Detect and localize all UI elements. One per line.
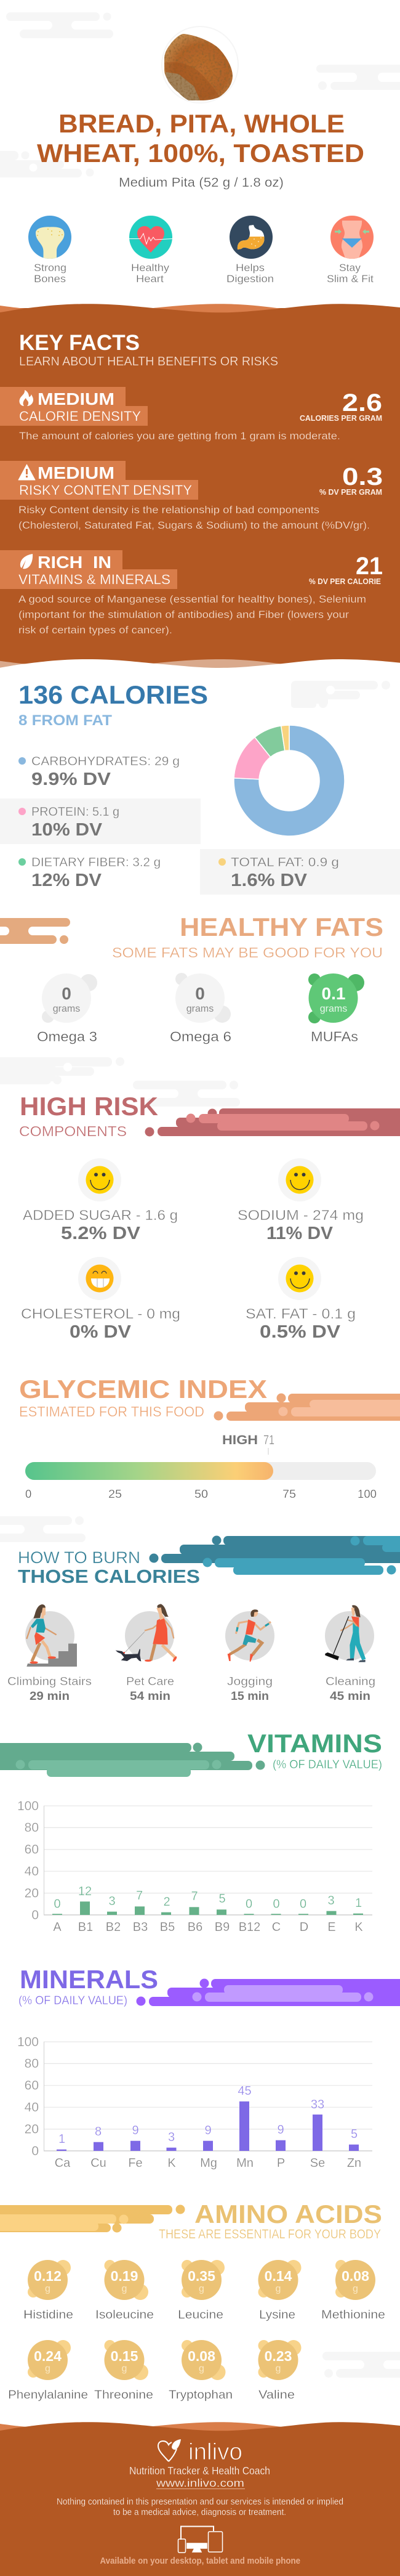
legend: carbohydrates: 9.9% DV <box>31 770 111 789</box>
heading: those calories: THOSE CALORIES <box>18 1566 200 1587</box>
benefit labels: Stay <box>339 262 361 274</box>
item: sodium: 11% DV <box>266 1224 334 1243</box>
icon: warning <box>18 465 35 480</box>
panel: calories <box>0 680 400 895</box>
legend: protein: PROTEIN: 5.1 g <box>31 805 119 819</box>
amino: tryptophan: 0.08 <box>188 2348 215 2364</box>
fact: rich in vitamins and minerals <box>0 550 383 636</box>
bar chart: minerals: 9 <box>277 2123 284 2137</box>
label: RISKY CONTENT DENSITY <box>19 482 192 498</box>
description: Risky Content density is the relationship of bad components <box>18 505 319 516</box>
gauge scale: 0 <box>25 1487 31 1500</box>
amino: valine: 0.23 <box>265 2348 292 2364</box>
item: cholesterol: CHOLESTEROL - 0 mg <box>21 1306 180 1322</box>
activity labels: 45 min <box>330 1690 370 1703</box>
value: 2.6 <box>342 389 382 416</box>
bar chart: minerals: 3 <box>168 2131 175 2144</box>
heading decoration <box>0 2204 185 2233</box>
activity: cleaning <box>325 1605 374 1662</box>
disclaimer: Nothing contained in this presentation and our services is intended or implied <box>57 2497 343 2507</box>
item: added sugar: ADDED SUGAR - 1.6 g <box>23 1207 178 1223</box>
heading decoration <box>214 1394 400 1421</box>
legend: dietary fiber <box>18 856 161 890</box>
activity labels <box>7 1675 375 1703</box>
panel: how to burn those calories <box>7 1535 400 1703</box>
item: cholesterol <box>21 1257 180 1342</box>
amino: valine <box>258 2340 302 2402</box>
item: added sugar <box>23 1158 178 1243</box>
activity: pet care <box>116 1604 178 1662</box>
legend: protein <box>0 798 201 844</box>
heading: calories: 136 CALORIES <box>18 680 208 709</box>
activity labels: 54 min <box>130 1690 170 1703</box>
icon: flame <box>19 390 33 406</box>
heading: high risk: HIGH RISK <box>20 1092 158 1121</box>
serving size: Medium Pita (52 g / 1.8 oz) <box>119 176 284 190</box>
bar chart: vitamins: B3 <box>133 1920 148 1934</box>
bar chart: vitamins: 0 <box>31 1908 39 1922</box>
bar chart: vitamins <box>17 1799 372 1934</box>
amino: histidine: Histidine <box>23 2309 73 2322</box>
disclaimer <box>57 2497 343 2517</box>
gauge bar <box>25 1462 376 1480</box>
amino: lysine: g <box>276 2283 281 2294</box>
bar chart: minerals: 9 <box>204 2124 212 2137</box>
icon: strong bones <box>28 216 71 260</box>
subheading: from fat: 8 FROM FAT <box>18 712 112 729</box>
heading decoration <box>145 1108 400 1136</box>
panel: amino acids <box>0 2200 385 2402</box>
panel: glycemic index <box>19 1375 400 1500</box>
rating: MEDIUM <box>38 389 114 408</box>
bar chart: minerals: 45 <box>238 2084 252 2098</box>
amino: leucine <box>178 2260 225 2322</box>
bar chart: vitamins: C <box>272 1920 281 1934</box>
donut chart <box>234 725 345 836</box>
label: VITAMINS & MINERALS <box>18 572 170 587</box>
disclaimer: to be a medical advice, diagnosis or treatment. <box>113 2508 286 2517</box>
benefit labels: Heart <box>136 273 164 285</box>
bar chart: minerals: 20 <box>25 2122 39 2137</box>
gauge scale: 50 <box>194 1487 208 1500</box>
bar chart: vitamins: K <box>354 1920 363 1934</box>
amino: isoleucine: 0.19 <box>111 2268 138 2284</box>
heading: minerals: MINERALS <box>20 1965 158 1994</box>
rating: MEDIUM <box>38 463 114 482</box>
amino: threonine: 0.15 <box>111 2348 138 2364</box>
bar chart: vitamins: 60 <box>25 1842 39 1857</box>
heading: healthy fats: HEALTHY FATS <box>180 912 383 941</box>
logo: inlivo <box>158 2439 242 2465</box>
header clouds <box>0 12 400 177</box>
omega 6 <box>170 973 231 1044</box>
heading: vitamins: VITAMINS <box>247 1729 382 1758</box>
bar chart: vitamins: 100 <box>17 1799 39 1813</box>
legend: total fat: TOTAL FAT: 0.9 g <box>231 856 339 869</box>
rating label: HIGH <box>222 1433 258 1447</box>
bar chart: vitamins: 5 <box>218 1892 226 1906</box>
bar chart: minerals: 1 <box>58 2132 65 2146</box>
activity labels: 15 min <box>231 1690 269 1703</box>
label: CALORIE DENSITY <box>19 408 141 424</box>
panel: high risk components <box>19 1092 400 1342</box>
bar chart: minerals: 60 <box>25 2079 39 2092</box>
subheading: components: COMPONENTS <box>19 1123 127 1139</box>
legend: dietary fiber: 12% DV <box>31 871 102 890</box>
bar chart: vitamins: B9 <box>215 1920 230 1934</box>
bar chart: vitamins: 7 <box>191 1890 198 1903</box>
benefit labels: Healthy <box>131 262 170 274</box>
amino: phenylalanine: g <box>45 2363 50 2374</box>
description: The amount of calories you are getting from 1 gram is moderate. <box>19 431 340 442</box>
logo: inlivo: inlivo <box>188 2439 242 2465</box>
mufas: grams <box>320 1004 347 1014</box>
rating label: 71 <box>263 1433 274 1447</box>
bar chart: minerals: Cu <box>90 2156 106 2170</box>
bar chart: vitamins: A <box>53 1920 62 1934</box>
icon: healthy heart <box>129 216 172 259</box>
tagline: Nutrition Tracker & Health Coach <box>129 2464 270 2477</box>
item: cholesterol: 0% DV <box>70 1322 132 1342</box>
icon: digestion <box>230 216 273 259</box>
amino: phenylalanine <box>8 2340 88 2402</box>
bar chart: vitamins: 20 <box>25 1887 39 1900</box>
legend: carbohydrates: CARBOHYDRATES: 29 g <box>31 755 180 768</box>
unit: % DV PER CALORIE <box>309 577 381 586</box>
omega 3: grams <box>53 1004 80 1014</box>
rating label <box>222 1433 274 1455</box>
amino: tryptophan: g <box>199 2363 204 2374</box>
unit: CALORIES PER GRAM <box>300 413 382 423</box>
fact: risky content density <box>0 461 383 531</box>
gauge scale: 75 <box>282 1487 296 1500</box>
amino: threonine: Threonine <box>94 2389 153 2402</box>
mufas: 0.1 <box>322 984 345 1003</box>
value: 21 <box>356 553 383 580</box>
benefit labels: Helps <box>236 262 265 274</box>
panel: vitamins <box>0 1729 382 1934</box>
gauge scale: 100 <box>358 1487 377 1500</box>
icon: slim and fit <box>330 216 374 260</box>
amino: threonine: g <box>122 2363 127 2374</box>
heading decoration <box>0 918 70 944</box>
title: WHEAT, 100%, TOASTED <box>37 139 364 168</box>
omega 3: 0 <box>62 984 71 1003</box>
bar chart: minerals: 33 <box>311 2098 324 2111</box>
bar chart: vitamins: B2 <box>106 1920 121 1934</box>
subheading: (% OF DAILY VALUE) <box>18 1994 127 2007</box>
amino: methionine: Methionine <box>321 2309 385 2322</box>
amino: threonine <box>94 2340 153 2402</box>
bar chart: vitamins: E <box>327 1920 336 1934</box>
website: www.inlivo.com <box>156 2477 244 2489</box>
item: added sugar: 5.2% DV <box>61 1224 141 1243</box>
heading: glycemic index: GLYCEMIC INDEX <box>19 1375 267 1404</box>
icon: leaf <box>20 554 33 569</box>
icon: devices <box>178 2526 223 2553</box>
bar chart: minerals: 8 <box>95 2125 102 2139</box>
mufas <box>308 973 364 1044</box>
legend: dietary fiber: DIETARY FIBER: 3.2 g <box>31 856 161 869</box>
amino: isoleucine <box>95 2260 154 2322</box>
description <box>18 594 366 636</box>
description: A good source of Manganese (essential for healthy bones), Selenium <box>18 594 366 605</box>
amino: histidine: g <box>45 2283 50 2294</box>
bar chart: vitamins: 12 <box>78 1885 92 1898</box>
amino: valine: g <box>276 2363 281 2374</box>
availability note: Available on your desktop, tablet and mobile phone <box>100 2556 300 2566</box>
activity labels: Climbing Stairs <box>7 1675 92 1688</box>
legend: total fat <box>200 849 400 895</box>
bar chart: minerals: 100 <box>17 2035 39 2049</box>
bar chart: minerals: Zn <box>347 2156 361 2170</box>
bar chart: vitamins: D <box>300 1920 308 1934</box>
bar chart: minerals: 0 <box>31 2144 39 2158</box>
bar chart: vitamins: 2 <box>163 1895 170 1909</box>
title: BREAD, PITA, WHOLE <box>58 109 345 138</box>
amino: leucine: Leucine <box>178 2309 223 2322</box>
item: saturated fat: 0.5% DV <box>260 1322 341 1342</box>
amino: isoleucine: Isoleucine <box>95 2309 154 2322</box>
amino: leucine: 0.35 <box>188 2268 215 2284</box>
amino: leucine: g <box>199 2283 204 2294</box>
omega 6: 0 <box>195 984 205 1003</box>
amino: valine: Valine <box>258 2389 295 2402</box>
legend: protein: 10% DV <box>31 820 103 840</box>
bar chart: vitamins: 0 <box>54 1898 61 1911</box>
description: risk of certain types of cancer). <box>18 625 172 636</box>
bar chart: vitamins: 3 <box>327 1894 335 1908</box>
omega 6: Omega 6 <box>170 1029 231 1044</box>
subheading: LEARN ABOUT HEALTH BENEFITS OR RISKS <box>19 354 278 368</box>
amino: lysine: Lysine <box>259 2309 295 2322</box>
gauge scale <box>25 1487 377 1500</box>
amino: histidine <box>23 2260 73 2322</box>
amino: histidine: 0.12 <box>34 2268 62 2284</box>
bar chart: vitamins: 0 <box>246 1898 252 1911</box>
item: sodium: SODIUM - 274 mg <box>238 1207 364 1223</box>
title <box>37 109 364 168</box>
bar chart: vitamins: 40 <box>25 1864 39 1879</box>
panel: healthy fats <box>0 912 383 1044</box>
panel: key facts <box>0 304 400 673</box>
activity labels: 29 min <box>30 1690 70 1703</box>
subheading: ESTIMATED FOR THIS FOOD <box>19 1404 204 1420</box>
bar chart: vitamins: B1 <box>78 1920 93 1934</box>
bar chart: vitamins: 1 <box>355 1896 362 1910</box>
description <box>18 505 370 531</box>
description: (Cholesterol, Saturated Fat, Sugars & Sodium) to the amount (%DV/gr). <box>18 520 370 531</box>
bar chart: vitamins: 0 <box>300 1898 306 1911</box>
bar chart: minerals: 40 <box>25 2100 39 2115</box>
amino: methionine: g <box>353 2283 358 2294</box>
bar chart: minerals: Mn <box>236 2156 254 2170</box>
amino: methionine <box>321 2260 385 2322</box>
item: saturated fat <box>246 1257 356 1342</box>
omega 3 <box>37 973 97 1044</box>
bar chart: minerals: K <box>167 2156 176 2170</box>
panel: footer <box>0 2422 400 2576</box>
benefit labels <box>34 262 374 285</box>
subheading: (% OF DAILY VALUE) <box>273 1758 382 1771</box>
bar chart: minerals: 5 <box>351 2127 358 2141</box>
bar chart: minerals: Se <box>310 2156 325 2170</box>
bar chart: minerals: Ca <box>55 2156 71 2170</box>
heading decoration <box>137 1979 400 2006</box>
bar chart: minerals <box>17 2035 372 2170</box>
benefit icons row <box>28 216 374 285</box>
amino: lysine <box>258 2260 302 2322</box>
bar chart: vitamins: 80 <box>25 1821 39 1835</box>
fact: calorie density <box>0 387 382 442</box>
bar chart: minerals: P <box>277 2156 285 2170</box>
benefit labels: Digestion <box>226 273 274 285</box>
item: saturated fat: SAT. FAT - 0.1 g <box>246 1306 356 1322</box>
heading decoration <box>149 1535 400 1575</box>
item: sodium <box>238 1158 364 1243</box>
value: 0.3 <box>342 463 383 490</box>
unit: % DV PER GRAM <box>319 487 382 497</box>
gauge scale: 25 <box>108 1487 122 1500</box>
activity labels: Jogging <box>227 1675 273 1688</box>
bar chart: vitamins: B5 <box>160 1920 175 1934</box>
amino: isoleucine: g <box>122 2283 127 2294</box>
description: (important for the stimulation of antibodies) and Fiber (lowers your <box>18 609 350 620</box>
omega 3: Omega 3 <box>37 1029 97 1044</box>
amino: phenylalanine: 0.24 <box>34 2348 62 2364</box>
heading: amino acids: AMINO ACIDS <box>194 2200 382 2229</box>
omega 6: grams <box>186 1004 214 1014</box>
bar chart: vitamins: 0 <box>273 1898 280 1911</box>
bar chart: minerals: 9 <box>132 2124 139 2137</box>
amino: tryptophan <box>169 2340 233 2402</box>
benefit labels: Strong <box>34 262 66 274</box>
benefit labels: Slim & Fit <box>327 273 374 285</box>
food image: bread <box>162 26 238 103</box>
legend: total fat: 1.6% DV <box>231 871 308 890</box>
bar chart: vitamins: B6 <box>188 1920 202 1934</box>
subheading: SOME FATS MAY BE GOOD FOR YOU <box>112 945 383 961</box>
amino: lysine: 0.14 <box>265 2268 292 2284</box>
bar chart: vitamins: 7 <box>136 1889 143 1903</box>
bar chart: vitamins: 3 <box>108 1895 116 1908</box>
amino: phenylalanine: Phenylalanine <box>8 2389 88 2402</box>
bar chart: minerals: 80 <box>25 2057 39 2071</box>
bar chart: minerals: Mg <box>200 2156 217 2170</box>
heading: key facts: KEY FACTS <box>19 331 140 355</box>
activity: climbing stairs <box>25 1604 77 1667</box>
activity: jogging <box>225 1609 274 1662</box>
legend: carbohydrates <box>18 755 180 789</box>
mufas: MUFAs <box>311 1029 358 1044</box>
heading decoration <box>0 1742 265 1777</box>
bar chart: minerals: Fe <box>128 2156 143 2170</box>
bar chart: vitamins: B12 <box>239 1920 260 1934</box>
activity labels: Cleaning <box>326 1675 375 1688</box>
amino: methionine: 0.08 <box>342 2268 369 2284</box>
amino: tryptophan: Tryptophan <box>169 2389 233 2402</box>
panel: minerals <box>17 1965 400 2170</box>
rating: RICH IN <box>38 553 111 572</box>
activity labels: Pet Care <box>126 1675 174 1688</box>
heading: how to burn: HOW TO BURN <box>18 1548 140 1567</box>
benefit labels: Bones <box>34 273 66 285</box>
